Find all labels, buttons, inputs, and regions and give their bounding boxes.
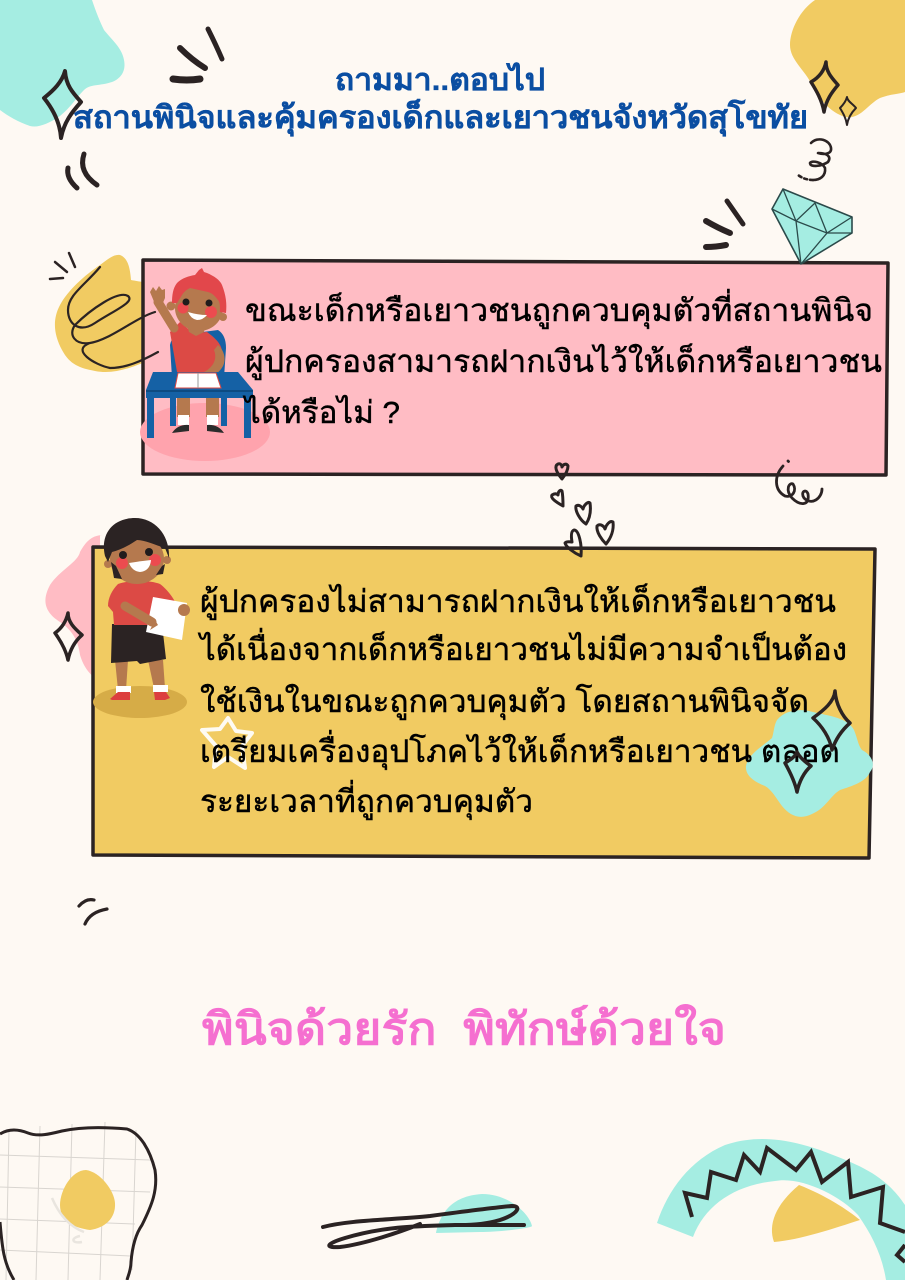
title: ถามมา..ตอบไป xyxy=(335,62,545,97)
decoration: burst dashes top xyxy=(173,29,222,80)
decoration: yellow blob behind question panel xyxy=(55,255,170,372)
decoration: curved strokes left xyxy=(68,154,97,188)
text: answer: เตรียมเครื่องอุปโภคไว้ให้เด็กหรือเยาวชน ตลอด xyxy=(200,730,840,771)
decoration: mint dome with scribble xyxy=(323,1194,532,1247)
icon: sparkle xyxy=(55,613,82,660)
decoration: burst dashes by diamond xyxy=(706,201,743,247)
icon: sparkles on mint blob xyxy=(785,691,850,792)
text: answer: ได้เนื่องจากเด็กหรือเยาวชนไม่มีความจำเป็นต้อง xyxy=(197,628,847,667)
decoration: scribble xyxy=(68,267,158,368)
slogan: พินิจด้วยรัก พิทักษ์ด้วยใจ xyxy=(202,1003,726,1054)
icon: diamond xyxy=(772,189,852,264)
decoration: squiggle xyxy=(798,139,831,180)
decoration: pink blob behind answer panel xyxy=(45,535,103,682)
title xyxy=(73,62,808,137)
decoration: mint blob top left xyxy=(0,0,124,127)
text: question xyxy=(242,289,882,430)
text: answer: ระยะเวลาที่ถูกควบคุมตัว xyxy=(200,780,533,821)
decoration: yellow blob top right xyxy=(790,0,905,117)
decoration: mint blob inside answer panel xyxy=(746,710,873,817)
text: question: ผู้ปกครองสามารถฝากเงินไว้ให้เด็กหรือเยาวชน xyxy=(245,343,882,380)
text: answer: ผู้ปกครองไม่สามารถฝากเงินให้เด็กหรือเยาวชน xyxy=(200,583,836,620)
text: question: ได้หรือไม่ ? xyxy=(242,395,400,430)
panel: answer xyxy=(55,518,875,858)
illustration: boy at desk xyxy=(140,268,270,461)
decoration: white star xyxy=(202,718,252,768)
illustration: boy holding paper xyxy=(93,518,190,718)
panel: question xyxy=(50,253,888,475)
decoration: grid with egg outline bottom left xyxy=(0,1122,156,1280)
decoration: mint arc with zigzag and yellow wedge xyxy=(657,1139,905,1280)
text: answer: ใช้เงินในขณะถูกควบคุมตัว โดยสถานพินิจจัด xyxy=(200,684,809,721)
icon: hearts xyxy=(552,464,613,556)
text: answer xyxy=(197,583,847,821)
decoration: small arc marks xyxy=(79,900,107,924)
decoration: yolk xyxy=(60,1170,115,1230)
title: สถานพินิจและคุ้มครองเด็กและเยาวชนจังหวัดสุโขทัย xyxy=(73,98,808,137)
decoration: dashes xyxy=(50,253,75,279)
text: question: ขณะเด็กหรือเยาวชนถูกควบคุมตัวที่สถานพินิจ xyxy=(245,289,873,330)
icon: sparkles top right xyxy=(811,62,856,125)
icon: sparkle top left xyxy=(44,71,81,138)
decoration: spiral xyxy=(776,461,822,504)
